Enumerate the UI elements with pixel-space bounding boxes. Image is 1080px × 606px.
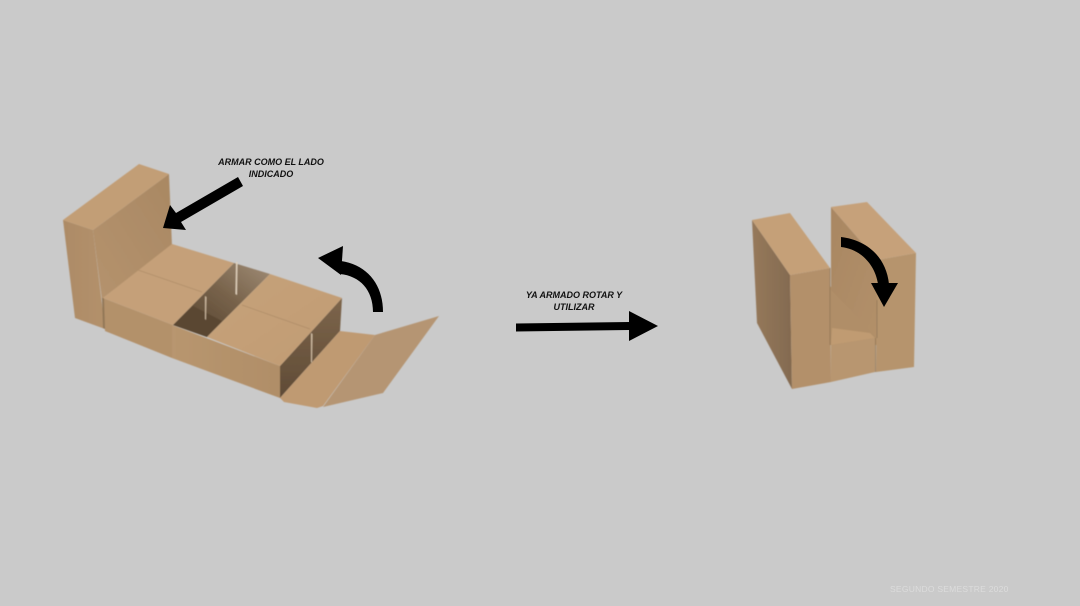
flap one: [280, 331, 375, 408]
text: rotate and use: YA ARMADO ROTAR Y: [526, 290, 622, 300]
divider, outer: [205, 296, 206, 320]
floor of slot: [831, 328, 875, 345]
seams: [829, 268, 831, 345]
divider, inner: [236, 262, 238, 295]
icon: assembled box: [752, 202, 916, 389]
right block inner face: [831, 207, 877, 338]
lower wall side strip: [102, 298, 105, 329]
flap two: [323, 316, 439, 407]
right panel crease: [242, 305, 310, 329]
slot back fill: [829, 285, 877, 345]
arrow: curved fold upward: [318, 246, 383, 312]
left block front: [790, 268, 831, 389]
opening floor shadow: [173, 306, 222, 337]
left block side: [752, 220, 792, 389]
upright wall top face: [63, 164, 169, 230]
right top panel: [207, 274, 342, 366]
arrow: curved rotation downward: [841, 237, 898, 307]
text: assembly instruction: [218, 157, 324, 178]
text: assembly instruction: INDICADO: [249, 168, 293, 178]
left block top: [752, 213, 830, 275]
left top panel: [103, 244, 234, 325]
footer text: SEGUNDO SEMESTRE 2020: [890, 584, 1009, 594]
right end divider: [311, 333, 312, 363]
arrow: points to the wall side: [163, 177, 243, 230]
upright wall inner face: [93, 174, 172, 300]
base left side: [103, 298, 173, 358]
text: assembly instruction: ARMAR COMO EL LADO: [218, 157, 324, 167]
opening between panels: [173, 263, 270, 337]
right block top: [831, 202, 916, 260]
right block front: [876, 253, 916, 372]
text: rotate and use: UTILIZAR: [554, 302, 594, 312]
left panel crease: [138, 270, 202, 292]
text: rotate and use: [526, 290, 623, 312]
upright wall front panel: [63, 220, 105, 329]
base front side: [172, 325, 280, 398]
arrow: to assembled box: [516, 311, 658, 341]
right end opening: [280, 298, 342, 398]
icon: unfolded cardboard box: [63, 164, 439, 408]
lower front: [831, 338, 875, 382]
